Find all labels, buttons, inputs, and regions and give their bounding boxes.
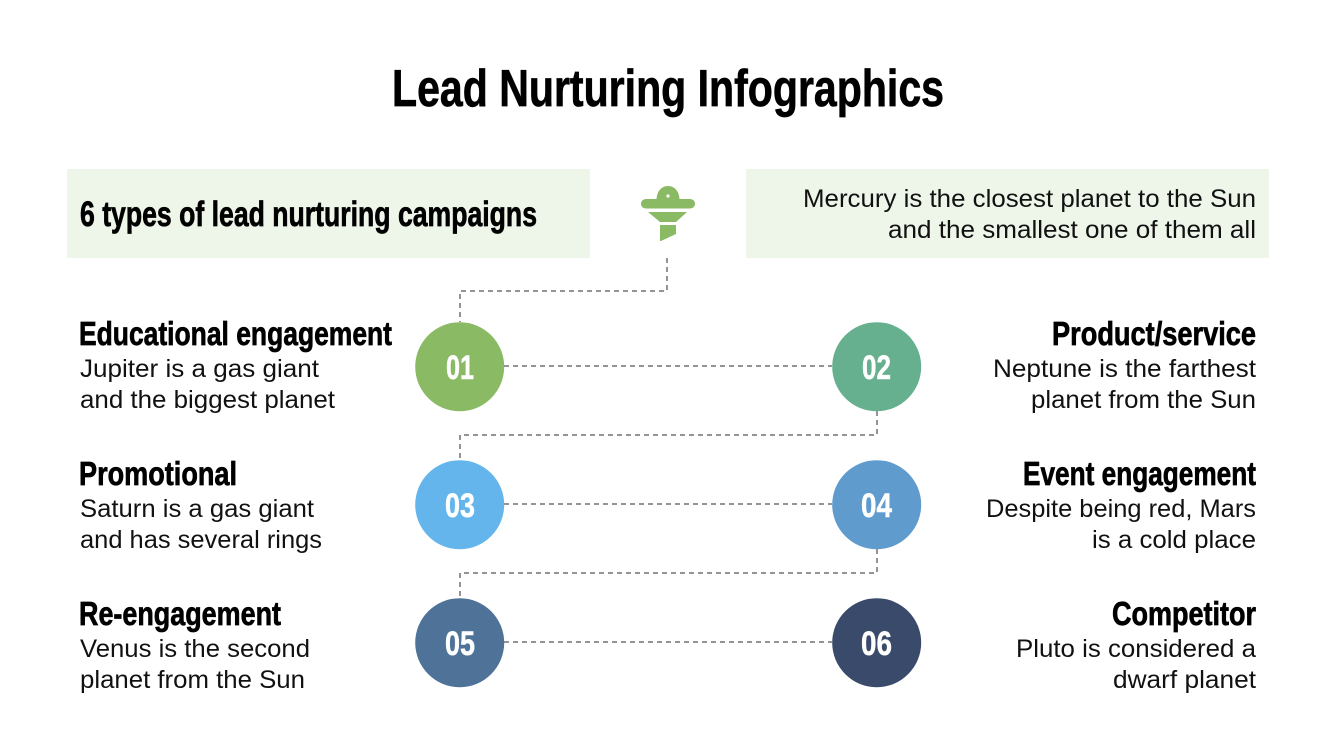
text: Re-engagement: planet from the Sun [80,666,305,694]
text: Competitor [1016,595,1256,694]
text: Product/service [993,315,1256,414]
title: Lead Nurturing Infographics [392,60,944,118]
step 02 circle: 02 [862,349,891,387]
step 01 circle: 01 [446,349,474,387]
step 06 circle [832,598,921,687]
text: Event engagement [986,455,1256,554]
text: Competitor: Pluto is considered a [1016,635,1256,663]
text: Event engagement: Event engagement [1023,455,1256,492]
step 05 circle [415,598,504,687]
text: Product/service: Neptune is the farthest [993,355,1256,383]
text: Promotional: Promotional [79,455,237,492]
step 05 circle: 05 [445,625,475,663]
step 04 circle: 04 [861,487,892,525]
connector: funnel to step 01 [460,258,667,322]
text: Product/service: planet from the Sun [1031,386,1256,414]
text: Event engagement: is a cold place [1092,526,1256,554]
text: Educational engagement [79,315,392,414]
step 02 circle [832,322,921,411]
step 03 circle: 03 [445,487,475,525]
panel: campaign heading [67,169,590,258]
connector: step 04 to 05 [460,549,877,598]
step 06 circle: 06 [861,625,892,663]
panel: description [746,169,1269,258]
connector: step 02 to 03 [460,411,877,460]
step 01 circle [415,322,504,411]
text: Re-engagement [79,595,310,694]
text: Educational engagement: Jupiter is a gas giant [80,355,319,383]
text: Educational engagement: and the biggest planet [80,386,335,414]
text: Promotional: Saturn is a gas giant [80,495,314,523]
text: Promotional: and has several rings [80,526,322,554]
text: Event engagement: Despite being red, Mars [986,495,1256,523]
connector: step 05 to 06 [504,641,832,643]
connector: step 03 to 04 [504,503,832,505]
text: Promotional [79,455,322,554]
panel: description: Mercury is the closest planet to the Sun [803,185,1256,213]
icon: funnel [641,186,695,241]
text: Competitor: dwarf planet [1113,666,1256,694]
text: Re-engagement: Venus is the second [80,635,310,663]
panel: campaign heading: 6 types of lead nurturing campaigns [80,195,537,234]
text: Educational engagement: Educational engagement [79,315,392,352]
step 04 circle [832,460,921,549]
text: Product/service: Product/service [1052,315,1256,352]
panel: description: and the smallest one of them all [888,216,1256,244]
text: Re-engagement: Re-engagement [79,595,281,632]
step 03 circle [415,460,504,549]
connector: step 01 to 02 [504,365,832,367]
text: Competitor: Competitor [1112,595,1256,632]
